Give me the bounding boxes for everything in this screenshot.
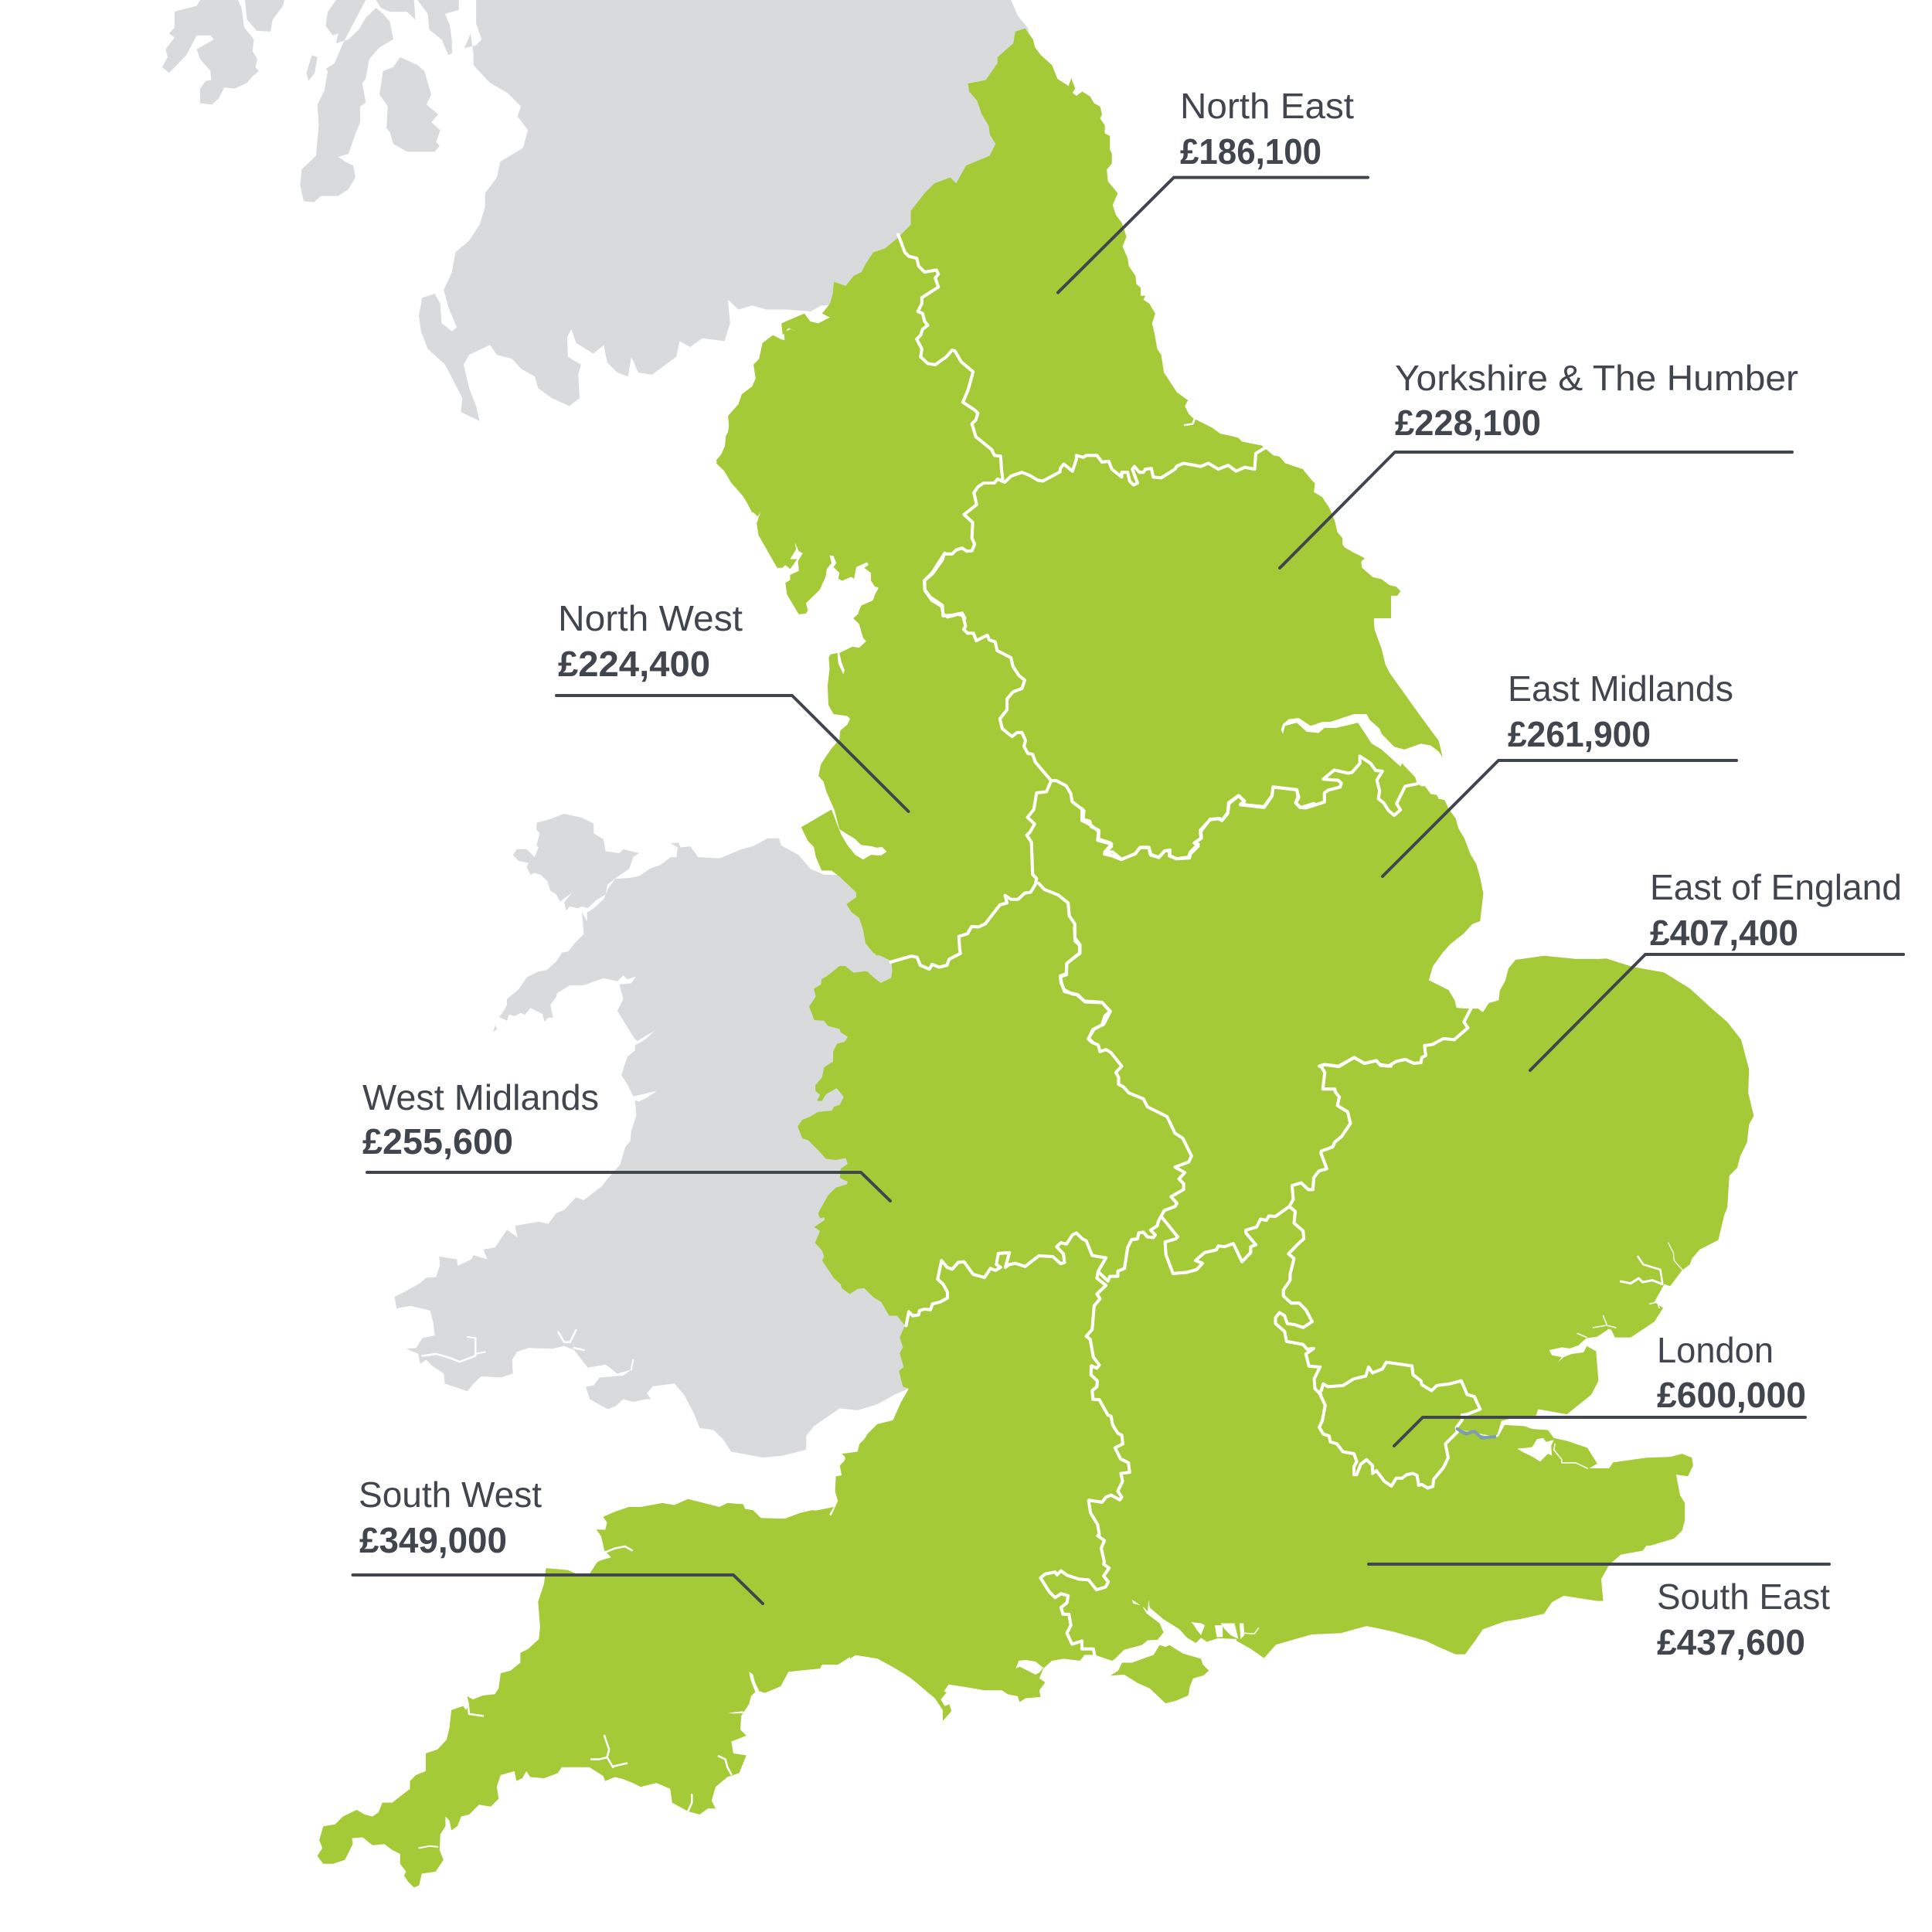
label: East of England: £407,400: [1650, 913, 1798, 953]
region boundaries: [891, 235, 1480, 1655]
label: West Midlands: [362, 1077, 890, 1201]
label: East of England: East of England: [1650, 867, 1902, 907]
label: North West: [556, 598, 909, 811]
land: England: [318, 29, 1753, 1887]
label: South East: [1369, 1564, 1830, 1662]
estuaries and inlets: [419, 419, 1682, 1848]
label: East Midlands: [1383, 668, 1736, 876]
label: Yorkshire & The Humber: [1280, 358, 1798, 568]
label: North East: £186,100: [1180, 131, 1321, 172]
land: Scotland and islands: [162, 0, 1035, 421]
label: North West: North West: [558, 598, 743, 638]
label: East Midlands: £261,900: [1508, 714, 1651, 754]
land: Wales: [395, 814, 923, 1458]
label: South West: [352, 1475, 763, 1604]
label: West Midlands: £255,600: [362, 1121, 513, 1162]
label: South East: South East: [1657, 1577, 1830, 1617]
label: South West: £349,000: [359, 1520, 507, 1560]
label: Yorkshire & The Humber: £228,100: [1395, 403, 1541, 443]
label: South East: £437,600: [1657, 1622, 1805, 1662]
label: East of England: [1530, 867, 1903, 1070]
label: South West: South West: [359, 1475, 542, 1515]
label: North West: £224,400: [558, 644, 710, 684]
River Thames: [1458, 1429, 1495, 1438]
label: North East: [1058, 86, 1368, 293]
label: London: £600,000: [1657, 1375, 1806, 1415]
label: London: London: [1657, 1330, 1774, 1370]
label: West Midlands: West Midlands: [362, 1077, 599, 1117]
label: East Midlands: East Midlands: [1508, 668, 1733, 709]
label: Yorkshire & The Humber: Yorkshire & The Humber: [1395, 358, 1798, 398]
label: North East: North East: [1180, 86, 1354, 126]
label: London: [1394, 1330, 1806, 1446]
